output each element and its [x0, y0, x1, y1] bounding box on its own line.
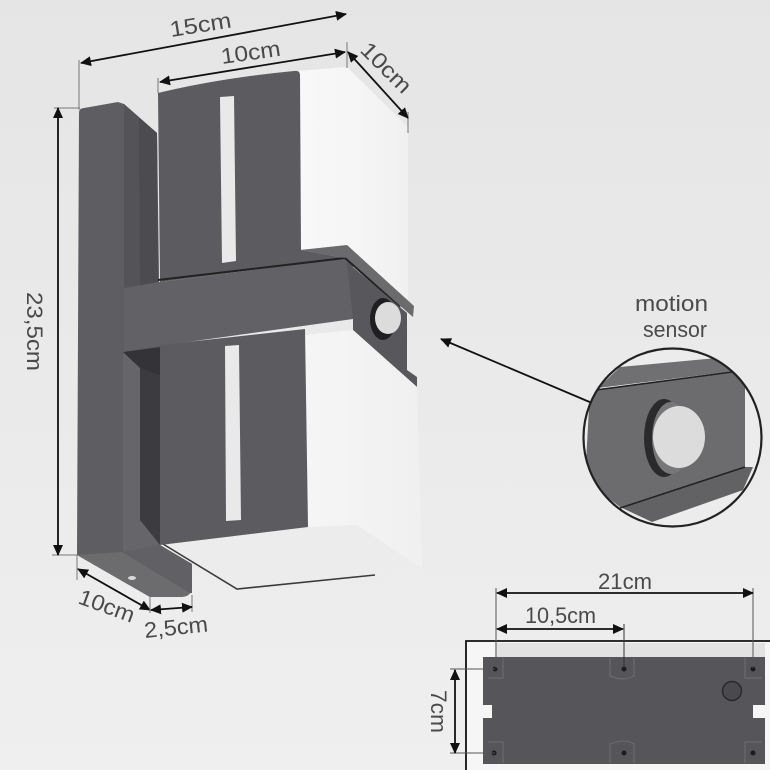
plate outline	[466, 641, 770, 770]
mounting plate	[466, 641, 770, 770]
wall mount back plate	[77, 102, 192, 597]
dimension: top 10cm	[158, 36, 347, 93]
sensor	[370, 298, 401, 340]
motion sensor detail circle	[584, 348, 762, 526]
lower white shade	[163, 330, 422, 589]
arrow to sensor	[441, 339, 592, 403]
dimension: depth 10cm	[348, 37, 417, 133]
lower dark panel	[160, 329, 308, 545]
dimension: 15cm	[79, 8, 346, 110]
dimension: 2,5cm	[143, 595, 209, 643]
upper white shade	[297, 67, 408, 320]
dimension: base 10cm	[75, 555, 150, 628]
plate body	[483, 657, 765, 764]
raised bosses	[488, 658, 762, 763]
screw holes	[492, 666, 756, 756]
lower slot	[225, 345, 241, 521]
dimension: 23,5cm: 23,5cm	[22, 292, 47, 371]
lid top edge	[300, 245, 414, 317]
motion sensor label: sensor	[643, 317, 707, 342]
detail sensor	[644, 399, 672, 477]
housing side	[347, 262, 417, 387]
mount side face	[124, 104, 158, 289]
motion sensor label: motion	[635, 291, 708, 316]
detail lip	[620, 467, 753, 522]
plate shadow	[495, 643, 765, 657]
dimension: 15cm: 15cm	[168, 8, 233, 42]
lower shade underside	[163, 525, 421, 589]
upper dark panel	[158, 71, 345, 282]
dimension: 10,5cm	[497, 603, 624, 668]
lower recess	[123, 347, 160, 552]
upper slot	[220, 96, 236, 263]
foot screw hole	[128, 576, 136, 580]
detail body	[585, 370, 745, 507]
dimension: 7cm	[426, 669, 495, 753]
motion sensor label	[635, 291, 708, 342]
dimension: 7cm: 7cm	[426, 690, 451, 733]
dimension: depth 10cm: 10cm	[355, 37, 417, 98]
dimension: base 10cm: 10cm	[75, 584, 138, 628]
dimension: 21cm: 21cm	[598, 569, 652, 594]
wall lamp	[77, 67, 422, 597]
dimension: 10,5cm: 10,5cm	[525, 603, 596, 628]
horizontal arm	[124, 258, 353, 352]
dimension: top 10cm: 10cm	[219, 36, 282, 69]
foot plate	[77, 545, 192, 597]
round button	[722, 682, 742, 700]
detail lid	[598, 358, 735, 388]
dimension: 2,5cm: 2,5cm	[143, 611, 209, 643]
